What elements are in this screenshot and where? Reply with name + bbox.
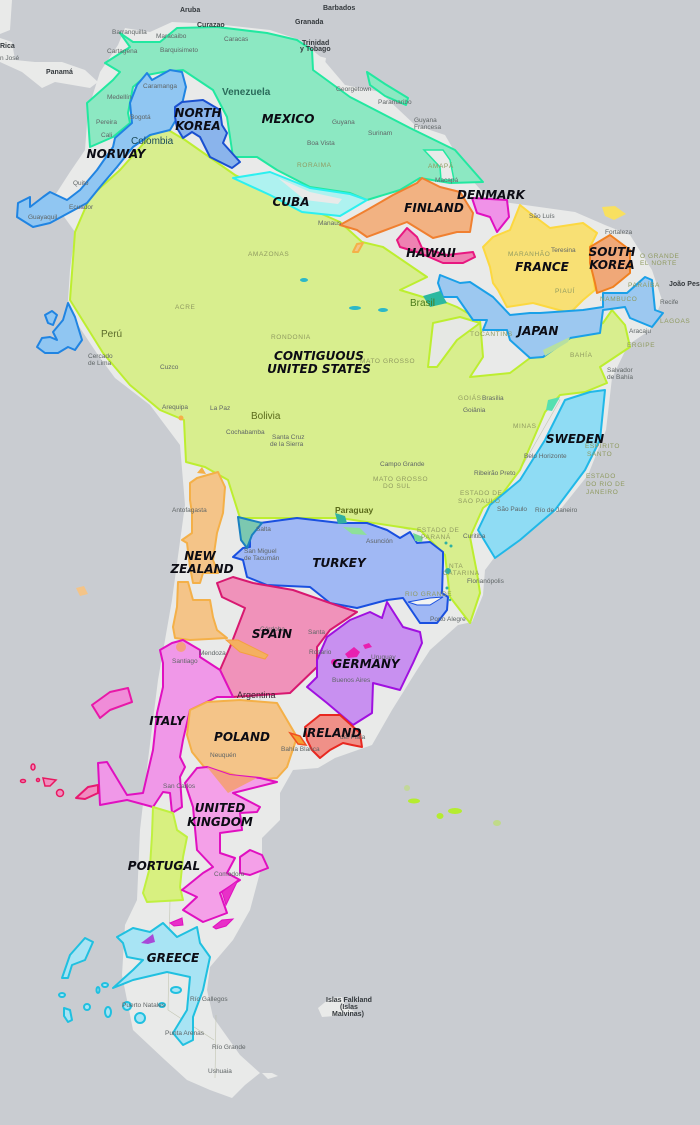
place names on the map: PARAÍBA: [628, 280, 660, 289]
place names on the map: GOIÁS: [458, 393, 482, 402]
place names on the map: Caramanga: [143, 83, 177, 90]
country: Italy: [20, 640, 233, 813]
country: France: [483, 205, 626, 313]
place names on the map: Curitiba: [463, 533, 486, 540]
label: Sweden: SWEDEN: [546, 432, 604, 446]
place names on the map: Ribeirão Preto: [474, 470, 516, 477]
country: Portugal: [143, 807, 187, 902]
place names on the map: Guyana: [332, 119, 355, 126]
place names on the map: Aracaju: [629, 328, 651, 335]
country: South Korea: [590, 235, 630, 293]
place names on the map: Salta: [256, 526, 271, 533]
place names on the map: Asunción: [366, 538, 393, 545]
country: Spain: [217, 577, 357, 697]
place names on the map: Cali: [101, 132, 112, 139]
place names on the map: NTA: [449, 563, 463, 570]
label: Japan: JAPAN: [516, 324, 558, 338]
place names on the map: AMAZONAS: [248, 251, 289, 258]
label: Norway: NORWAY: [87, 147, 147, 161]
place names on the map: ESPÍRITO: [585, 441, 620, 450]
place names on the map: Comodoro: [214, 871, 245, 878]
place names on the map: Quito: [73, 180, 89, 187]
place names on the map: Francesa: [414, 124, 441, 131]
label: South Korea: KOREA: [589, 258, 635, 272]
place names on the map: Mendoza: [199, 650, 226, 657]
country: Sweden: [478, 390, 605, 558]
label: Greece: GREECE: [147, 951, 200, 965]
place names on the map: São Luís: [529, 213, 555, 220]
country: Hawaii: [397, 228, 475, 263]
label: Contiguous United States: UNITED STATES: [267, 362, 371, 376]
label: South Korea: SOUTH: [589, 245, 635, 259]
place names on the map: ESTADO: [586, 473, 616, 480]
place names on the map: Aruba: [180, 7, 200, 14]
place names on the map: Buenos Aires: [332, 677, 371, 684]
island: Sardinia: [92, 688, 132, 718]
place names on the map: JANEIRO: [586, 489, 618, 496]
place names on the map: del Plata: [340, 734, 366, 741]
place names on the map: Goiânia: [463, 407, 486, 414]
place names on the map: Curazao: [197, 22, 225, 29]
place names on the map: Perú: [101, 329, 122, 340]
place names on the map: Cochabamba: [226, 429, 265, 436]
place names on the map: Río de Janeiro: [535, 507, 578, 514]
place names on the map: (Islas: [340, 1004, 358, 1011]
place names on the map: Paramaribo: [378, 99, 412, 106]
country: Mexico: [87, 27, 483, 200]
label: Colombia: Colombia: [131, 136, 174, 147]
place names on the map: DO RIO DE: [586, 481, 625, 488]
country: United Kingdom: [170, 767, 277, 929]
country: Cuba: [233, 172, 367, 216]
place names on the map: São Paulo: [497, 506, 527, 513]
label: New Zealand: NEW: [184, 549, 216, 563]
label: Cuba: CUBA: [273, 195, 309, 209]
label: Spain: SPAIN: [252, 627, 292, 641]
place names on the map: Neuquén: [210, 752, 237, 759]
place names on the map: RONDONIA: [271, 334, 311, 341]
place names on the map: MARANHÃO: [508, 249, 550, 258]
place names on the map: Maracaibo: [156, 33, 187, 40]
country name labels: [87, 106, 635, 965]
country: Japan: [423, 275, 663, 358]
label: Portugal: PORTUGAL: [128, 859, 200, 873]
place names on the map: PARANÁ: [421, 532, 451, 541]
place names on the map: MINAS: [513, 423, 537, 430]
place names on the map: Río Gallegos: [190, 996, 228, 1003]
label: United Kingdom: UNITED: [195, 801, 245, 815]
place names on the map: Salvador: [607, 367, 633, 374]
place names on the map: de Tacumán: [244, 555, 280, 562]
place names on the map: Panamá: [46, 69, 73, 76]
islands: small Italian isles: [20, 764, 64, 796]
place names on the map: Manaus: [318, 220, 342, 227]
place names on the map: Barquisimeto: [160, 47, 198, 54]
place names on the map: Boa Vista: [307, 140, 335, 147]
teal fragments along the Turkish coast: [335, 513, 452, 601]
place names on the map: Santa: [308, 629, 325, 636]
place names on the map: Bogotá: [130, 114, 151, 121]
label: Germany: GERMANY: [332, 657, 401, 671]
label: North Korea: NORTH: [174, 106, 222, 120]
country: New Zealand: [76, 416, 227, 640]
place names on the map: ESTADO DE: [460, 490, 503, 497]
place names on the map: Guyana: [414, 117, 437, 124]
place names on the map: Pereira: [96, 119, 117, 126]
country: Finland: [340, 178, 473, 252]
label: North Korea: [174, 106, 222, 133]
label: Brasil: Brasil: [410, 298, 435, 309]
label: Mexico: MEXICO: [262, 112, 314, 126]
label: United Kingdom: [187, 801, 253, 829]
country: North Korea: [175, 100, 240, 168]
place names on the map: Rosario: [309, 649, 332, 656]
place names on the map: de la Sierra: [270, 441, 304, 448]
place names on the map: Puerto Natales: [122, 1002, 166, 1009]
label: South Korea: [589, 245, 635, 272]
place names on the map: Granada: [295, 19, 324, 26]
island: Northern Ireland: [240, 850, 268, 875]
place names on the map: Santa Cruz: [272, 434, 305, 441]
place names on the map: ESTADO DE: [417, 527, 460, 534]
label: North Korea: KOREA: [175, 119, 221, 133]
lake: Great Lakes hole: [428, 317, 480, 367]
place names on the map: ACRE: [175, 304, 196, 311]
place names on the map: San Carlos: [163, 783, 196, 790]
islands: Svalbard off Peru: [37, 303, 82, 353]
place names on the map: Barranquilla: [112, 29, 147, 36]
place names on the map: Cercado: [88, 353, 113, 360]
place names on the map: Malvinas): [332, 1011, 364, 1018]
label: New Zealand: [169, 549, 234, 576]
place names on the map: PIAUÍ: [555, 286, 575, 295]
place names on the map: O GRANDE: [640, 253, 680, 260]
label: Contiguous United States: CONTIGUOUS: [274, 349, 364, 363]
place names on the map: DO SUL: [383, 483, 411, 490]
place names on the map: Cuzco: [160, 364, 179, 371]
place names on the map: Florianópolis: [467, 578, 505, 585]
islands: Hawaii-size green islets: [404, 785, 501, 826]
place names on the map: SANTO: [587, 451, 612, 458]
place names on the map: y Tobago: [300, 46, 331, 53]
place names on the map: Teresina: [551, 247, 576, 254]
country: New Zealand tail over Spain: [226, 640, 268, 659]
place names on the map: Santiago: [172, 658, 198, 665]
place names on the map: La Paz: [210, 405, 230, 412]
country: Greece: [59, 923, 210, 1045]
label: Contiguous United States: [267, 349, 371, 376]
country: Denmark: [472, 198, 509, 232]
islands: Scottish isles: [170, 880, 238, 929]
place names on the map: TOCANTINS: [470, 331, 513, 338]
island: small Great Lakes fragments: [300, 278, 388, 312]
label: Argentina: Argentina: [237, 690, 276, 700]
country: Ireland: [290, 715, 362, 758]
place names on the map: Guayaquil: [28, 214, 58, 221]
place names on the map: Macapá: [435, 177, 459, 184]
place names on the map: Georgetown: [336, 86, 372, 93]
place names on the map: Antofagasta: [172, 507, 207, 514]
label: New Zealand: ZEALAND: [169, 562, 234, 576]
islands: Crete and Aegean isles: [59, 938, 181, 1023]
label: Poland: POLAND: [214, 730, 270, 744]
label: Denmark: DENMARK: [457, 188, 527, 202]
place names on the map: San Miguel: [244, 548, 277, 555]
country: Norway: [17, 70, 186, 227]
province borders on land: [90, 30, 560, 1078]
label: Turkey: TURKEY: [312, 556, 367, 570]
place names on the map: Surinam: [368, 130, 392, 137]
place names on the map: Punta Arenas: [165, 1030, 205, 1037]
place names on the map: Río Grande: [212, 1044, 246, 1051]
label: Venezuela: Venezuela: [222, 87, 271, 98]
place names on the map: de Lima: [88, 360, 112, 367]
place names on the map: Bahía Blanca: [281, 746, 320, 753]
place names on the map: EL NORTE: [640, 260, 677, 267]
place names on the map: MATO GROSSO: [360, 358, 415, 365]
place names on the map: Islas Falkland: [326, 997, 372, 1004]
label: France: FRANCE: [515, 260, 570, 274]
place names on the map: Brasília: [482, 395, 504, 402]
place names on the map: Ushuaia: [208, 1068, 232, 1075]
country: contiguous United States: [70, 125, 630, 623]
place names on the map: Paraguay: [335, 505, 374, 515]
country: Poland: [187, 700, 297, 780]
place names on the map: Cartagena: [107, 48, 138, 55]
place names on the map: Recife: [660, 299, 679, 306]
place names on the map: Caracas: [224, 36, 249, 43]
place names on the map: Belo Horizonte: [524, 453, 567, 460]
label: Italy: ITALY: [149, 714, 186, 728]
place names on the map: Porto Alegre: [430, 616, 466, 623]
place names on the map: Uruguay: [371, 654, 396, 661]
place names on the map: RIO GRANDE: [405, 591, 452, 598]
place names on the map: Fortaleza: [605, 229, 632, 236]
country: Turkey: [233, 513, 452, 623]
place names on the map: MATO GROSSO: [373, 476, 428, 483]
label: Ireland: IRELAND: [303, 726, 361, 740]
place names on the map: Medellín: [107, 94, 132, 101]
place names on the map: de Bahía: [607, 374, 633, 381]
place names on the map: BAHÍA: [570, 350, 593, 359]
country: Germany: [307, 602, 422, 725]
place names on the map: Rica: [0, 43, 15, 50]
label: Bolivia: Bolivia: [251, 411, 281, 422]
place names on the map: AMAPÁ: [428, 161, 454, 170]
label: Finland: FINLAND: [404, 201, 464, 215]
place names on the map: Barbados: [323, 5, 355, 12]
place names on the map: Arequipa: [162, 404, 188, 411]
place names on the map: Trinidad: [302, 40, 329, 47]
place names on the map: SAO PAULO: [458, 498, 500, 505]
label: United Kingdom: KINGDOM: [187, 815, 253, 829]
place names on the map: LAGOAS: [660, 318, 690, 325]
label: Hawaii: HAWAII: [406, 246, 456, 260]
place names on the map: ERGIPE: [627, 342, 655, 349]
place names on the map: Ecuador: [69, 204, 94, 211]
place names on the map: CATARINA: [443, 570, 480, 577]
place names on the map: Córdoba: [260, 626, 285, 633]
place names on the map: NAMBUCO: [600, 296, 637, 303]
place names on the map: n José: [0, 55, 20, 62]
island: Sicily tail: [76, 785, 98, 799]
place names on the map: Campo Grande: [380, 461, 425, 468]
place names on the map: RORAIMA: [297, 162, 332, 169]
